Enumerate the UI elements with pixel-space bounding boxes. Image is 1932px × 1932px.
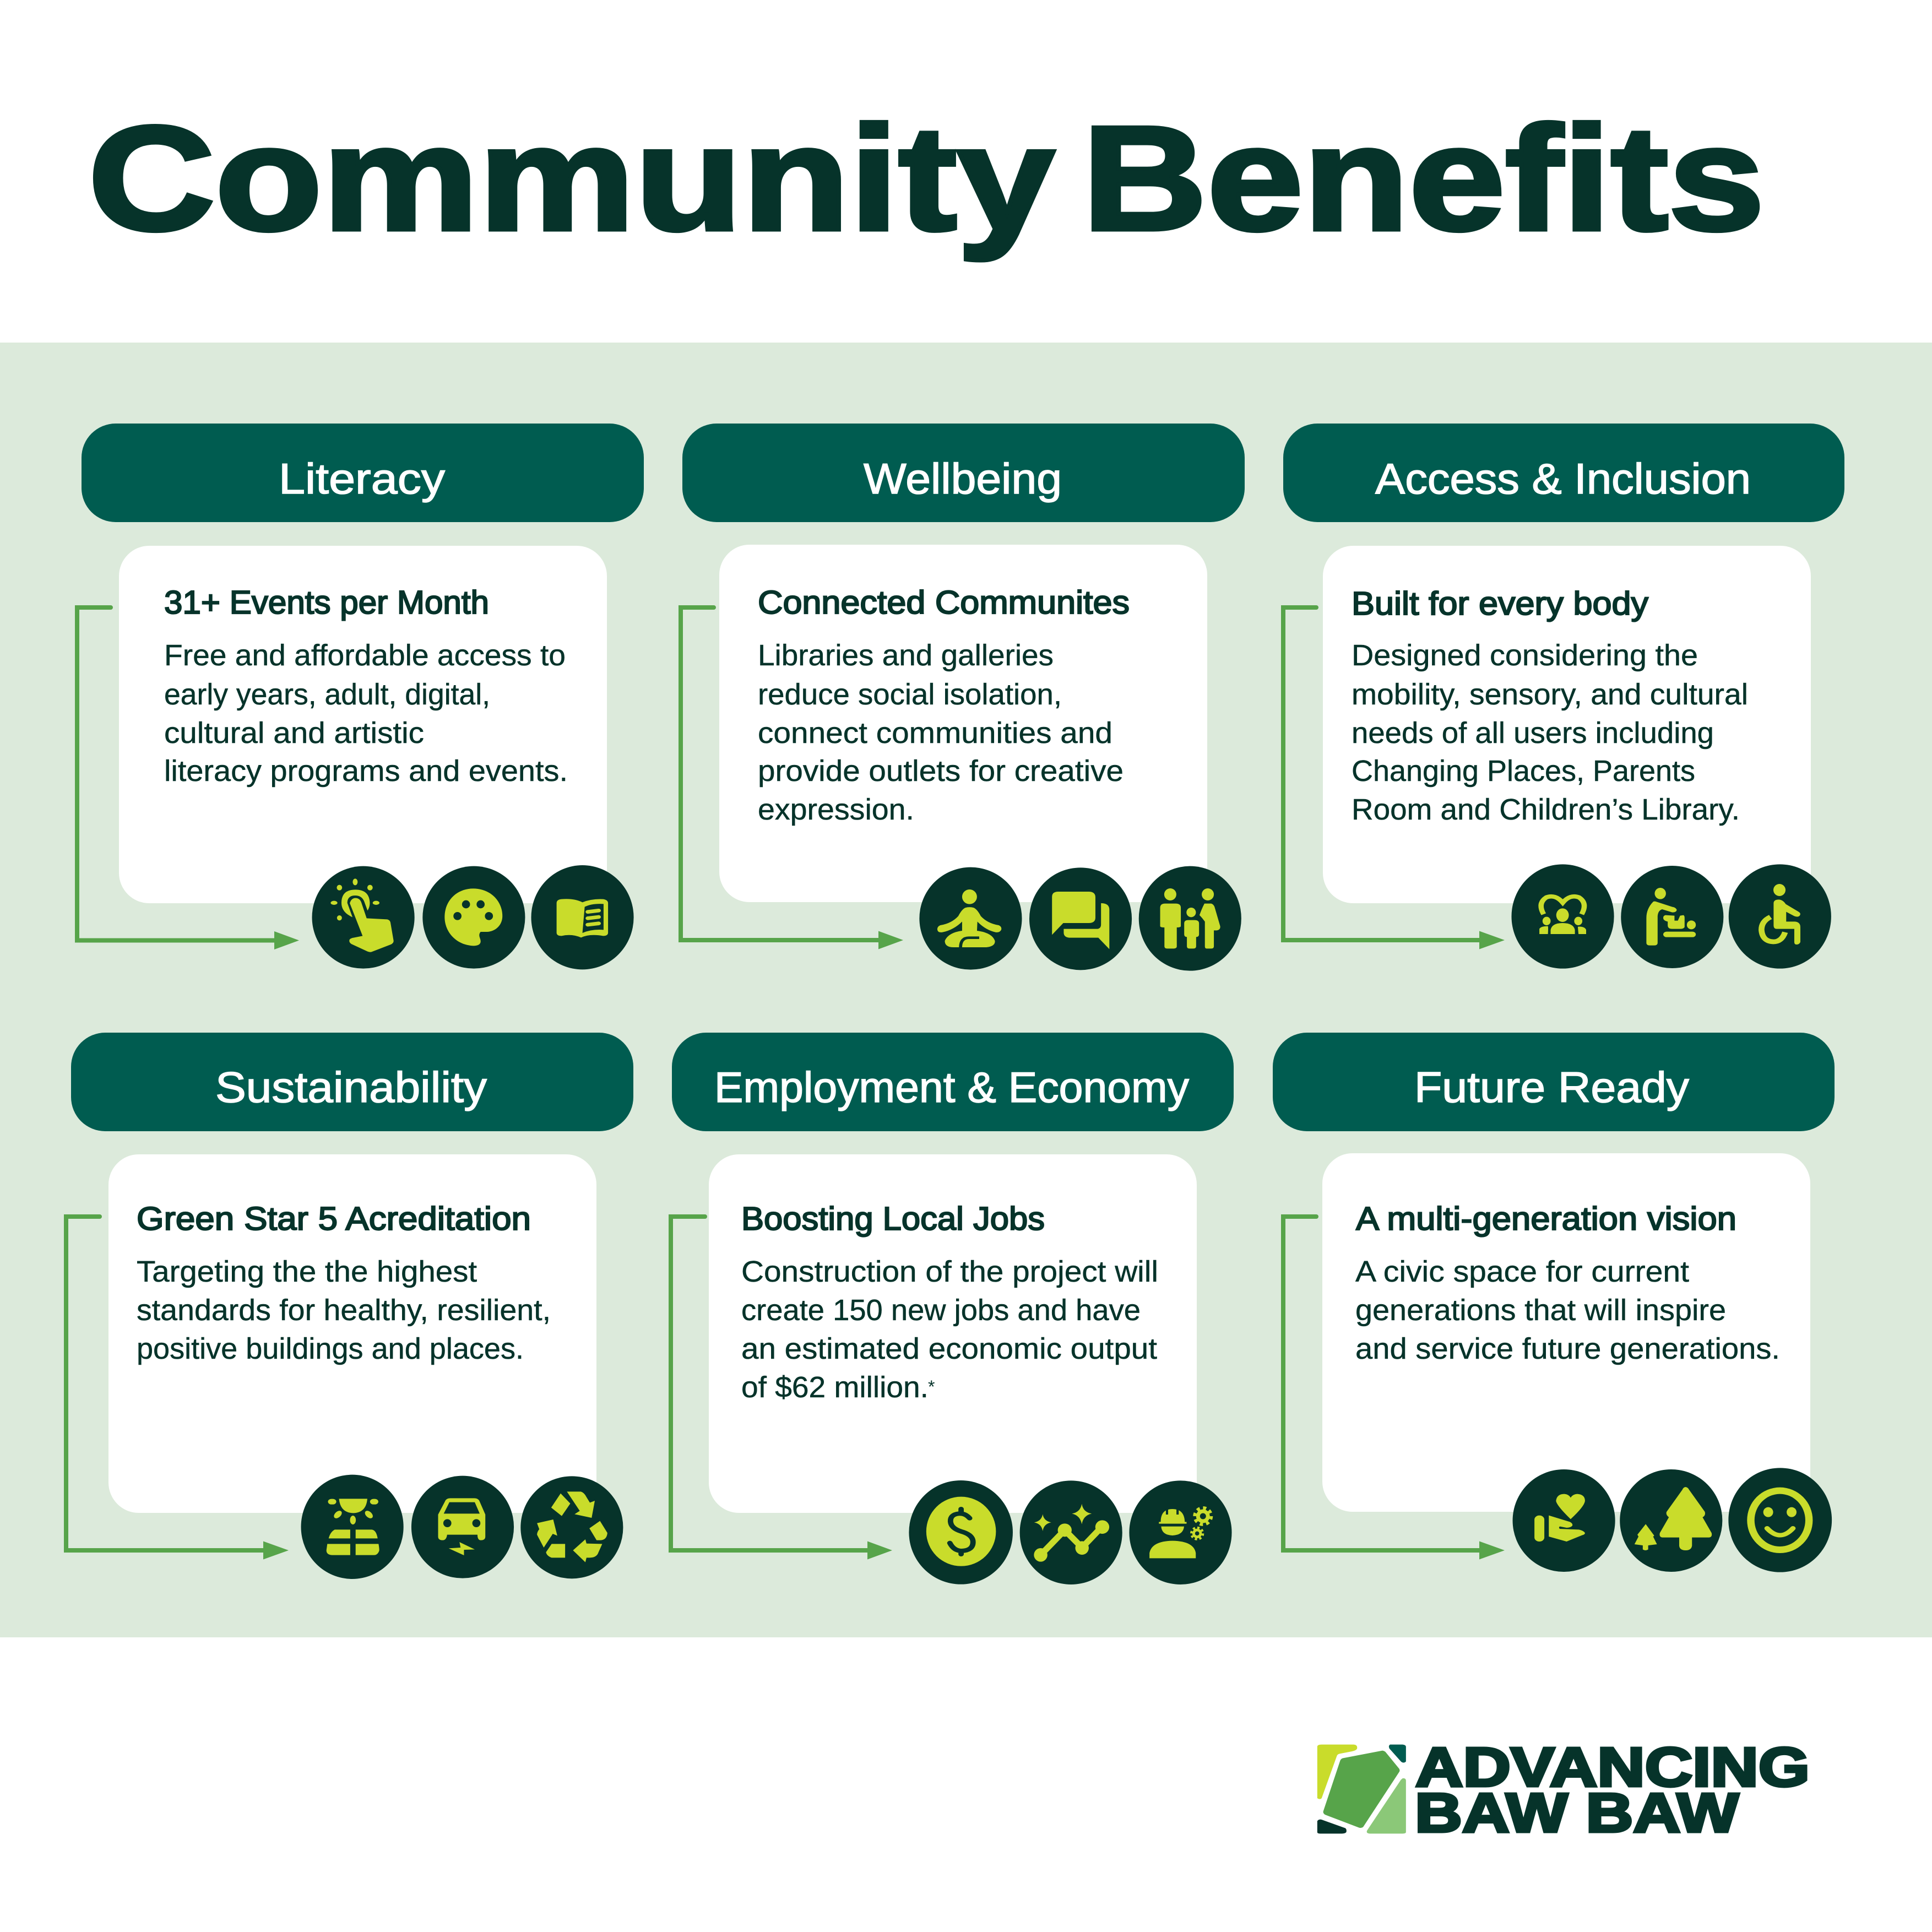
card: future ready: and service future generations. [1355,1332,1780,1365]
background band [0,343,1932,1637]
card: access and inclusion: needs of all users including [1352,717,1714,750]
icon: dollar coin [909,1480,1013,1584]
icons: future ready [1513,1468,1832,1572]
card: access and inclusion: mobility, sensory, and cultural [1352,678,1748,711]
heading pill: employment and economy: Employment & Economy [714,1063,1189,1111]
card: employment and economy: * [928,1377,935,1397]
panel: employment and economy [671,1033,1234,1584]
card: literacy [119,546,607,903]
icon: electric car [411,1476,514,1578]
card: wellbeing: provide outlets for creative [758,755,1124,788]
card: future ready: generations that will inspire [1355,1294,1726,1327]
icons: sustainability [301,1475,623,1579]
heading pill: sustainability [71,1033,633,1131]
icon: worker and gears [1129,1480,1232,1584]
icon: meditation [919,867,1022,970]
panel: access and inclusion [1283,424,1844,969]
card: wellbeing: connect communities and [758,717,1112,750]
icon: solar panel [301,1475,404,1579]
icon: trees [1620,1469,1722,1572]
icons: access and inclusion [1511,864,1831,969]
card: access and inclusion: Changing Places, Parents [1352,755,1695,788]
card: sustainability: Green Star 5 Acreditation [137,1201,531,1237]
icon: people in heart [1511,864,1614,969]
heading pill: employment and economy [672,1033,1234,1131]
icon: hand and heart [1513,1469,1615,1572]
heading pill: wellbeing [682,424,1245,522]
panel: sustainability [66,1033,633,1579]
heading pill: access and inclusion [1283,424,1844,522]
heading pill: access and inclusion: Access & Inclusion [1375,454,1751,503]
icon: baby change [1621,866,1723,968]
heading pill: wellbeing: Wellbeing [864,454,1062,503]
logo wordmark [1415,1736,1810,1844]
card: access and inclusion [1323,546,1811,903]
arrow: literacy [77,607,299,949]
icon: smiley face [1728,1468,1832,1572]
card: literacy: literacy programs and events. [164,755,568,788]
heading pill: future ready: Future Ready [1414,1063,1689,1111]
arrow: access and inclusion [1283,607,1505,949]
icon: family [1139,866,1241,971]
icon: palette [422,866,525,969]
title: Benefits [1082,96,1765,262]
logo: advancing baw baw [1317,1736,1810,1844]
card: access and inclusion: Built for every body [1352,585,1649,622]
panel: wellbeing [681,424,1245,971]
card: future ready: A multi-generation vision [1356,1201,1736,1237]
card: sustainability: Targeting the the highest [137,1255,477,1288]
arrow: future ready [1283,1217,1505,1560]
card: wellbeing: Libraries and galleries [758,639,1054,672]
card: access and inclusion: Room and Children’s Library. [1352,793,1740,826]
card: employment and economy: of $62 million. [741,1371,929,1404]
arrow: wellbeing [681,607,903,949]
icons: wellbeing [919,866,1241,971]
card: employment and economy: an estimated economic output [741,1332,1157,1365]
heading pill: literacy: Literacy [279,454,445,503]
title: Community [88,96,1056,262]
heading pill: future ready [1273,1033,1835,1131]
icons: literacy [312,865,634,969]
card: literacy: cultural and artistic [164,717,424,750]
card: future ready: A civic space for current [1355,1255,1689,1288]
card: employment and economy: Construction of the project will [741,1255,1158,1288]
icon: growth chart [1020,1480,1122,1584]
card: wellbeing: reduce social isolation, [758,678,1062,711]
card: employment and economy: create 150 new jobs and have [741,1294,1141,1327]
arrow: employment and economy [671,1217,892,1560]
heading pill: sustainability: Sustainability [215,1063,487,1111]
icon: chat bubbles [1029,867,1132,970]
logo wordmark: BAW BAW [1415,1782,1739,1844]
panel: literacy [77,424,644,969]
card: sustainability: positive buildings and places. [137,1332,524,1365]
heading pill: literacy [82,424,644,522]
title [88,96,1765,262]
card: future ready [1322,1153,1810,1512]
card: sustainability: standards for healthy, resilient, [137,1294,551,1327]
card: literacy: early years, adult, digital, [164,678,490,711]
card: access and inclusion: Designed considering the [1352,639,1698,672]
card: literacy: Free and affordable access to [164,639,566,672]
icon: wheelchair [1729,864,1831,969]
logo mark [1317,1745,1406,1833]
card: literacy: 31+ Events per Month [164,584,489,621]
logo wordmark: ADVANCING [1415,1736,1810,1798]
card: employment and economy: Boosting Local Jobs [741,1201,1045,1237]
arrow: sustainability [66,1217,289,1560]
icon: recycle [520,1476,623,1578]
card: wellbeing: expression. [758,793,914,826]
icons: employment and economy [909,1480,1232,1584]
panel: future ready [1273,1033,1835,1572]
icon: touch hand [312,866,415,969]
card: wellbeing [719,545,1207,902]
icon: book [531,865,634,969]
card: employment and economy [709,1154,1197,1513]
card: wellbeing: Connected Communites [758,584,1130,621]
card: sustainability [108,1154,596,1513]
